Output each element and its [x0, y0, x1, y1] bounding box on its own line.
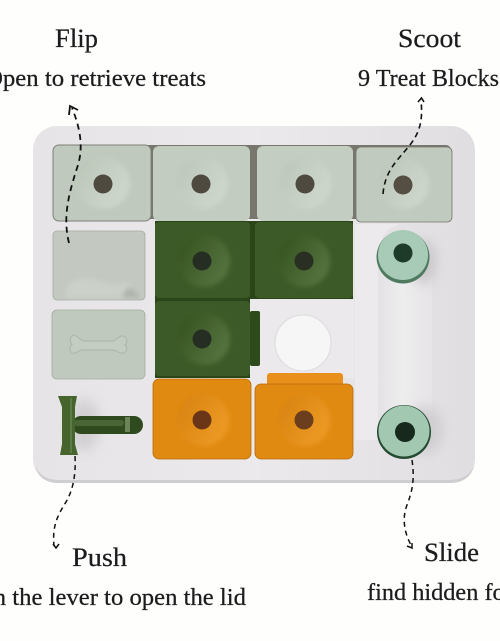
open lid panel: [53, 231, 145, 300]
push lever: [58, 396, 143, 455]
text: scoot caption: 9 Treat Blocks: [358, 66, 499, 92]
sage tile 4: [356, 147, 452, 222]
orange tile 1: [153, 379, 251, 459]
bone lid panel: [52, 310, 145, 379]
arrow: flip, dashed upward: [66, 106, 81, 243]
heading: Flip: Flip: [55, 24, 98, 53]
sage tile 3: [257, 146, 353, 221]
tile row: sage treat blocks: [53, 145, 452, 222]
tile group: orange treat blocks: [153, 373, 353, 459]
board: white puzzle tray: [33, 126, 475, 483]
arrow: scoot, dashed upward: [383, 98, 424, 194]
green tile 3: [155, 301, 250, 376]
sage tile 2: [153, 146, 250, 221]
arrow: push, dashed downward: [53, 456, 75, 548]
slider knob: bottom: [377, 405, 431, 459]
empty round well: [256, 300, 354, 378]
sage tile 1: [53, 145, 151, 221]
icon: embossed bone: [70, 335, 127, 353]
slide track: [355, 224, 443, 459]
heading: Slide: Slide: [424, 538, 479, 567]
orange tile 2: [255, 373, 353, 459]
slider knob: top: [376, 230, 430, 284]
heading: Scoot: Scoot: [398, 24, 462, 53]
green tile 2: [255, 222, 353, 298]
green tile 1: [155, 222, 250, 298]
heading: Push: Push: [72, 543, 127, 572]
arrow: slide, dashed downward: [404, 460, 413, 548]
tile group: green treat blocks: [155, 221, 353, 378]
